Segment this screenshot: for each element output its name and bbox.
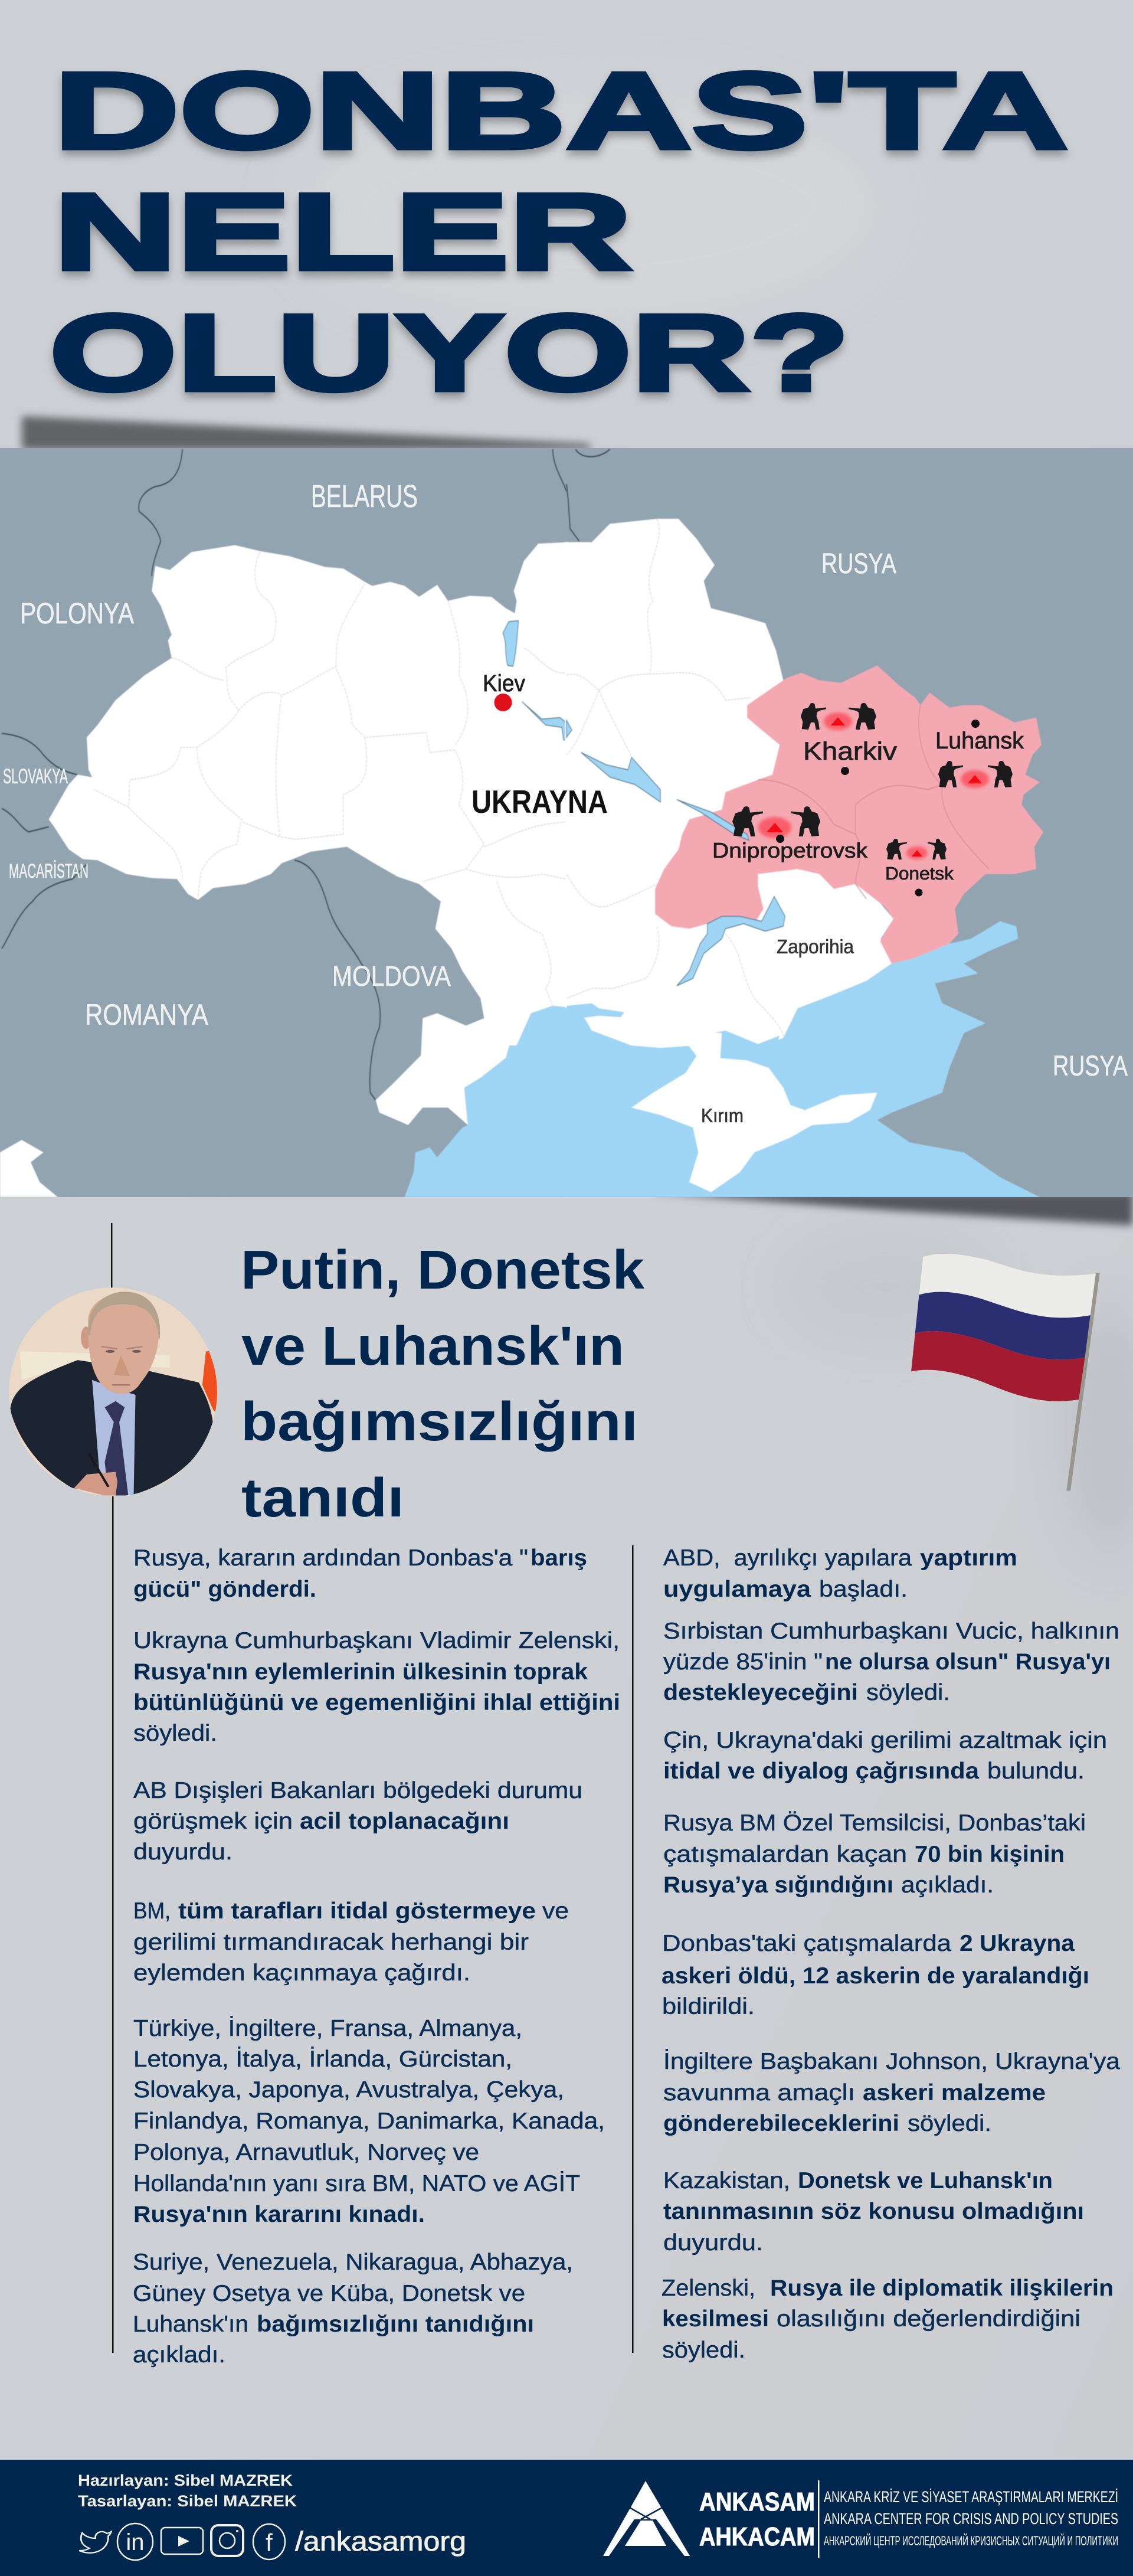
right column: casualties: 2 Ukrayna — [960, 1931, 1075, 1956]
left column: Rusya baris gucu: barış — [531, 1545, 587, 1571]
right column: ABD: yaptırım — [920, 1545, 1017, 1571]
Kharkiv marker — [801, 703, 898, 775]
Kiev marker: Kiev — [483, 671, 525, 697]
icon: facebook — [253, 2524, 285, 2559]
sub heading: tanıdı — [241, 1467, 404, 1528]
right column: ABD: başladı. — [819, 1577, 908, 1602]
left column: Zelenski statement — [133, 1628, 620, 1746]
left column: countries condemning: Hollanda'nın yanı sıra BM, NATO ve AGİT — [133, 2171, 580, 2196]
right column: ABD — [663, 1545, 1017, 1602]
right column: Rusya BM: Rusya BM Özel Temsilcisi, Donbas’taki — [663, 1810, 1086, 1836]
right column: ABD: uygulamaya — [663, 1577, 811, 1602]
map bottom shadow — [649, 1192, 1133, 1225]
right column: Ingiltere: askeri malzeme — [863, 2080, 1046, 2106]
country labels: SLOVAKYA — [3, 765, 68, 788]
left column: BM: ve — [542, 1898, 569, 1924]
left column: countries condemning: Finlandya, Romanya, Danimarka, Kanada, — [133, 2108, 605, 2134]
right column: Sirbistan — [663, 1619, 1119, 1705]
left column: BM: BM, — [133, 1898, 171, 1924]
credits: Hazırlayan: Sibel MAZREK — [78, 2472, 293, 2489]
left column: countries condemning — [133, 2016, 605, 2227]
portrait of Putin — [0, 1283, 231, 1502]
sub heading: ve Luhansk'ın — [241, 1315, 624, 1377]
right column: Ingiltere: söyledi. — [908, 2111, 991, 2136]
right column: Cin: Çin, Ukrayna'daki gerilimi azaltmak için — [663, 1728, 1107, 1753]
left column: countries condemning: Slovakya, Japonya, Avustralya, Çekya, — [133, 2077, 564, 2103]
left column: Zelenski statement: bütünlüğünü ve egemenliğini ihlal ettiğini — [133, 1690, 620, 1715]
right column: Ingiltere: İngiltere Başbakanı Johnson, Ukrayna'ya — [663, 2049, 1120, 2074]
country labels: POLONYA — [20, 597, 135, 630]
Luhansk marker — [935, 720, 1024, 788]
right column: ABD: ABD, ayrılıkçı yapılara — [663, 1545, 912, 1571]
right column: Rusya BM: açıkladı. — [901, 1872, 994, 1898]
right column: Ingiltere: gönderebileceklerini — [663, 2111, 899, 2136]
right column: Sirbistan: yüzde 85'inin " — [663, 1649, 823, 1675]
right column: Rusya BM: 70 bin kişinin — [915, 1842, 1065, 1867]
country labels: BELARUS — [311, 479, 418, 514]
Kirim label: Kırım — [701, 1105, 744, 1126]
right column: Zelenski diplomacy: olasılığını değerlendirdiğini — [777, 2306, 1080, 2332]
map top shadow — [22, 416, 590, 450]
organisation names — [824, 2487, 1118, 2548]
left column: BM: eylemden kaçınmaya çağırdı. — [133, 1960, 470, 1986]
Dnipropetrovsk marker — [712, 806, 868, 862]
left column: Zelenski statement: Ukrayna Cumhurbaşkanı Vladimir Zelenski, — [133, 1628, 620, 1653]
logo wordmark: AHKACAM — [699, 2522, 815, 2551]
Donetsk marker — [885, 839, 954, 896]
vertical rule: lower left — [112, 1496, 113, 2353]
left column: Rusya baris gucu: gücü" gönderdi. — [133, 1577, 316, 1602]
country labels — [3, 479, 1128, 1082]
left column: countries recognising: Luhansk'ın — [133, 2312, 248, 2337]
right column: Rusya BM — [663, 1810, 1086, 1898]
title: OLUYOR? — [50, 292, 850, 413]
left column: countries recognising — [133, 2250, 573, 2368]
sub heading — [241, 1239, 644, 1528]
right column: Sirbistan: söyledi. — [866, 1680, 950, 1705]
country labels: RUSYA — [821, 548, 896, 580]
right column: Zelenski diplomacy — [662, 2276, 1114, 2363]
left column: countries condemning: Rusya'nın kararını kınadı. — [133, 2202, 425, 2227]
right column: Zelenski diplomacy: Rusya ile diplomatik ilişkilerin — [770, 2276, 1114, 2301]
country labels: MACARİSTAN — [9, 860, 89, 882]
icon: linkedin: in — [126, 2529, 145, 2555]
social handle: /ankasamorg — [295, 2526, 466, 2557]
left column: countries recognising: Güney Osetya ve Küba, Donetsk ve — [133, 2281, 525, 2306]
right column: Rusya BM: çatışmalardan kaçan — [663, 1842, 907, 1867]
logo mark — [603, 2481, 690, 2556]
left column: AB: AB Dışişleri Bakanları bölgedeki durumu — [133, 1778, 582, 1803]
title: NELER — [54, 171, 632, 292]
left column: AB — [133, 1778, 582, 1865]
title: DONBAS'TA — [54, 50, 1068, 171]
left column: countries recognising: Suriye, Venezuela, Nikaragua, Abhazya, — [133, 2250, 573, 2275]
vertical rule: upper left — [111, 1223, 112, 1289]
footer — [0, 2460, 1133, 2576]
right column: casualties — [662, 1931, 1089, 2019]
left column: BM — [133, 1898, 569, 1986]
left column: countries recognising: bağımsızlığını tanıdığını — [257, 2312, 534, 2337]
left column: AB: görüşmek için — [133, 1809, 293, 1834]
right column: Sirbistan: ne olursa olsun" Rusya'yı — [825, 1649, 1111, 1675]
right column: Kazakistan — [663, 2168, 1084, 2255]
Russian flag — [911, 1254, 1100, 1491]
left column: Rusya baris gucu — [133, 1545, 587, 1602]
title — [50, 50, 1068, 413]
logo wordmark — [699, 2487, 815, 2551]
Luhansk marker: Luhansk — [935, 728, 1024, 754]
right column: Sirbistan: destekleyeceğini — [663, 1680, 858, 1705]
right column: Kazakistan: duyurdu. — [663, 2230, 763, 2255]
left column: BM: tüm tarafları itidal göstermeye — [178, 1898, 536, 1924]
right column: Rusya BM: Rusya’ya sığındığını — [663, 1872, 893, 1898]
icon: instagram — [211, 2525, 243, 2556]
map shapes: eastern half — [565, 449, 1043, 1197]
right column: casualties: bildirildi. — [662, 1994, 755, 2019]
country labels: ROMANYA — [85, 998, 209, 1031]
credits: Tasarlayan: Sibel MAZREK — [78, 2492, 297, 2510]
right column: Cin: itidal ve diyalog çağrısında — [663, 1758, 979, 1784]
left column: countries condemning: Letonya, İtalya, İrlanda, Gürcistan, — [133, 2047, 512, 2072]
sub heading: Putin, Donetsk — [241, 1239, 644, 1300]
icon: linkedin — [117, 2523, 153, 2560]
Dnipropetrovsk marker: Dnipropetrovsk — [712, 838, 868, 862]
left column: Zelenski statement: Rusya'nın eylemlerinin ülkesinin toprak — [133, 1659, 588, 1685]
icon: youtube — [161, 2528, 203, 2554]
right column: Ingiltere: savunma amaçlı — [663, 2080, 855, 2106]
right column: casualties: Donbas'taki çatışmalarda — [662, 1931, 951, 1956]
left column: countries recognising: açıkladı. — [133, 2342, 225, 2368]
left column: Zelenski statement: söyledi. — [133, 1721, 217, 1746]
right column: Kazakistan: Donetsk ve Luhansk'ın — [798, 2168, 1053, 2193]
Donetsk marker: Donetsk — [885, 863, 954, 884]
map shapes: western half — [0, 449, 568, 1197]
country labels: UKRAYNA — [471, 783, 608, 820]
left column: AB: duyurdu. — [133, 1839, 233, 1865]
right column: Zelenski diplomacy: kesilmesi — [662, 2306, 769, 2332]
right column: Zelenski diplomacy: söyledi. — [662, 2338, 745, 2363]
left column: BM: gerilimi tırmandıracak herhangi bir — [133, 1930, 529, 1955]
Kharkiv marker: Kharkiv — [803, 737, 898, 766]
Kiev marker — [484, 674, 525, 711]
credits — [78, 2472, 297, 2510]
left column: countries condemning: Türkiye, İngiltere, Fransa, Almanya, — [133, 2016, 522, 2041]
country labels: MOLDOVA — [332, 961, 451, 992]
left column: Rusya baris gucu: Rusya, kararın ardından Donbas'a " — [133, 1545, 528, 1571]
map of Ukraine — [0, 448, 1133, 1197]
right column: Kazakistan: Kazakistan, — [663, 2168, 790, 2193]
icon: twitter — [79, 2532, 111, 2553]
sub heading: bağımsızlığını — [241, 1391, 638, 1452]
left column: AB: acil toplanacağını — [300, 1809, 509, 1834]
right column: casualties: askeri öldü, 12 askerin de yaralandığı — [662, 1963, 1089, 1989]
vertical rule: centre — [632, 1545, 634, 2353]
right column: Sirbistan: Sırbistan Cumhurbaşkanı Vucic, halkının — [663, 1619, 1119, 1644]
icon: facebook: f — [266, 2529, 273, 2557]
right column: Cin — [663, 1728, 1107, 1784]
left column: countries condemning: Polonya, Arnavutluk, Norveç ve — [133, 2140, 479, 2165]
logo wordmark: ANKASAM — [699, 2487, 815, 2516]
right column: Zelenski diplomacy: Zelenski, — [662, 2276, 755, 2301]
Zaporihia label: Zaporihia — [777, 936, 854, 957]
right column: Kazakistan: tanınmasının söz konusu olmadığını — [663, 2199, 1084, 2224]
right column: Ingiltere — [663, 2049, 1120, 2136]
right column: Cin: bulundu. — [987, 1758, 1085, 1784]
